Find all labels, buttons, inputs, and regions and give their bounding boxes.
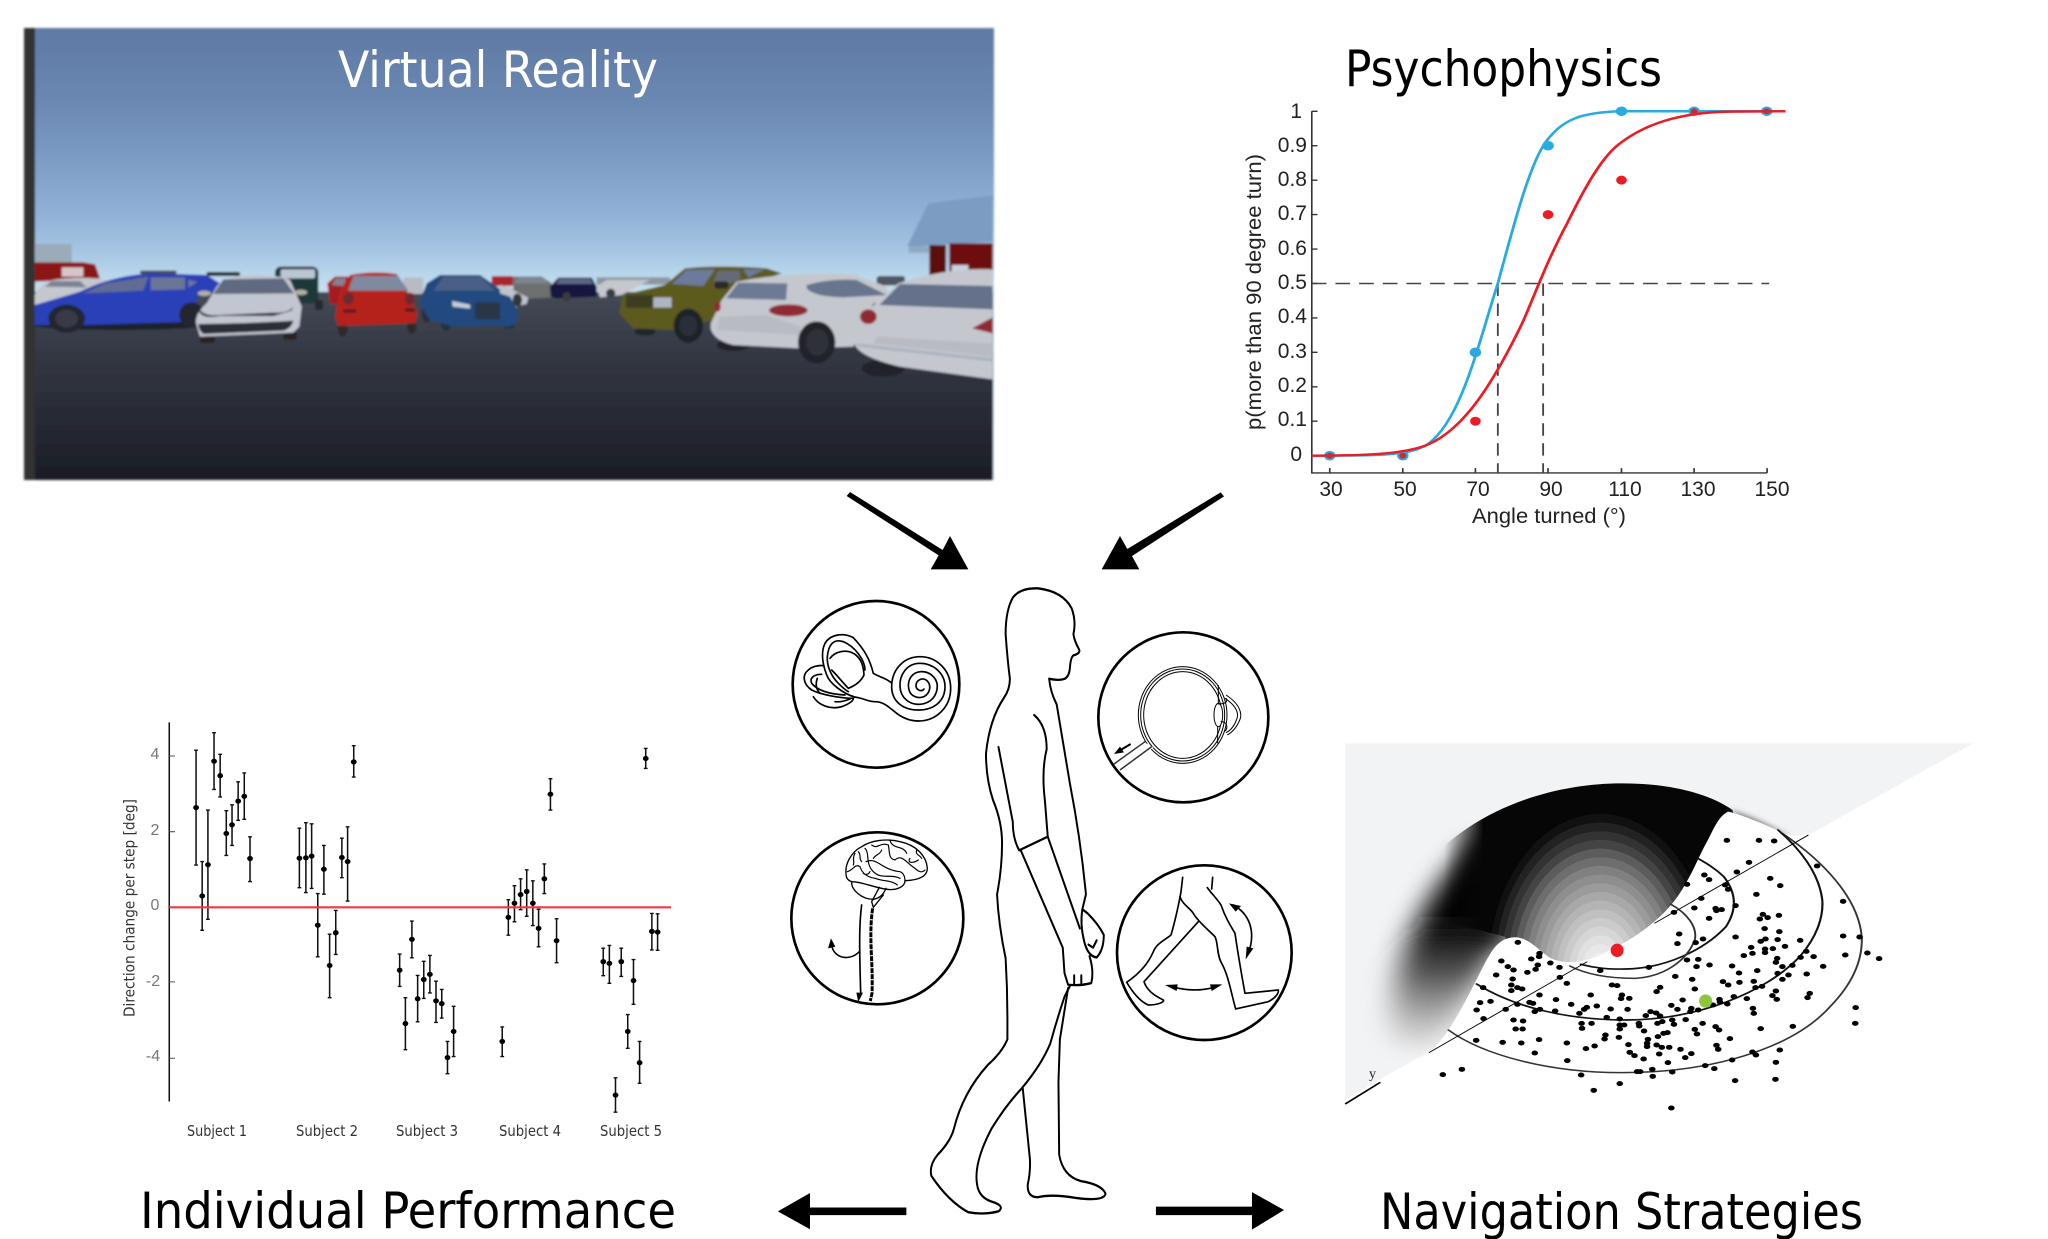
- y axis title: Direction change per step [deg]: [120, 799, 138, 1017]
- subject labels: Subject 4: [499, 1122, 561, 1140]
- floor cut-out: [1340, 743, 2020, 1239]
- arrow: to individual performance: [778, 1193, 906, 1229]
- chart: psychometric curves: [1243, 100, 1790, 528]
- y axis tick labels: 0.5: [1278, 271, 1307, 294]
- green point: [1699, 994, 1712, 1008]
- bowl of surface: [1446, 783, 1734, 962]
- x axis title: Angle turned (°): [1472, 505, 1626, 528]
- zero line: [169, 904, 671, 910]
- subject 1: [194, 733, 252, 930]
- x axis tick labels: 50: [1393, 478, 1417, 501]
- chart: direction change per step by subject: [120, 722, 671, 1140]
- icon: walking legs: [1117, 865, 1292, 1040]
- mean markers: [196, 758, 658, 1095]
- y axis tick labels: -4: [146, 1048, 160, 1065]
- y axis stub: [1345, 1082, 1380, 1104]
- icon: inner ear: [793, 601, 959, 768]
- pale surface plane: [1345, 743, 1973, 1100]
- x axis tick labels: 90: [1539, 478, 1563, 501]
- figure outline: [931, 588, 1106, 1213]
- subject labels: [187, 1122, 662, 1140]
- x axis tick labels: 70: [1466, 478, 1490, 501]
- subject 2: [297, 746, 356, 998]
- x axis tick labels: 30: [1319, 478, 1343, 501]
- axis letter y: y: [1369, 1067, 1376, 1082]
- y axis tick labels: 0.1: [1278, 408, 1307, 431]
- fold shading: [1728, 810, 1789, 837]
- y axis tick labels: 1: [1290, 100, 1302, 123]
- y axis tick labels: 0.7: [1278, 202, 1307, 225]
- y axis tick labels: 4: [151, 746, 160, 763]
- y axis tick labels: [1278, 100, 1307, 466]
- subject 4: [500, 779, 558, 1057]
- y axis tick labels: -2: [146, 973, 160, 990]
- left lobe of surface: [1393, 830, 1511, 1055]
- scatter points: [1443, 840, 1879, 1108]
- subject labels: Subject 2: [296, 1122, 358, 1140]
- scene image: car park: [24, 28, 994, 480]
- subject 3: [398, 921, 456, 1074]
- heading: Psychophysics: Psychophysics: [1345, 40, 1662, 98]
- y axis tick labels: 0: [1290, 443, 1302, 466]
- panel: virtual reality scene: [24, 28, 994, 480]
- x axis tick labels: 130: [1680, 478, 1716, 501]
- arrow: from psychophysics: [1102, 492, 1224, 569]
- subject 5: [601, 748, 660, 1112]
- title: Virtual Reality: Virtual Reality: [338, 41, 658, 99]
- y axis tick labels: 0.6: [1278, 237, 1307, 260]
- arrow: to navigation strategies: [1156, 1192, 1284, 1230]
- diagonal axis: [1429, 835, 1808, 1053]
- y axis tick labels: 0.8: [1278, 168, 1307, 191]
- subject labels: Subject 5: [600, 1122, 662, 1140]
- x axis tick labels: [1319, 478, 1790, 501]
- heading: Individual Performance: Individual Performance: [140, 1182, 676, 1239]
- contour rings: [1448, 830, 1862, 1073]
- chart: navigation surface and scatter: [1344, 744, 1972, 1110]
- y axis tick labels: 0.3: [1278, 340, 1307, 363]
- x axis tick labels: 110: [1608, 478, 1642, 501]
- arrows: inputs to walker: [847, 492, 1224, 569]
- y axis tick labels: [146, 746, 160, 1065]
- illustration: walking figure: [778, 588, 1284, 1230]
- icon: eye: [1098, 632, 1268, 802]
- icon: brain and spinal cord: [791, 832, 963, 1004]
- y axis title: p(more than 90 degree turn): [1243, 154, 1266, 430]
- y axis tick labels: 0.2: [1278, 374, 1307, 397]
- plot lines and points: [1312, 111, 1785, 473]
- red point: [1611, 944, 1624, 957]
- y axis tick labels: 0: [151, 897, 160, 914]
- y axis tick labels: 2: [151, 822, 160, 839]
- subject labels: Subject 3: [396, 1122, 458, 1140]
- arrow: from virtual reality: [847, 492, 968, 569]
- y axis tick labels: 0.4: [1278, 305, 1307, 328]
- x axis tick labels: 150: [1754, 478, 1790, 501]
- y axis tick labels: 0.9: [1278, 134, 1307, 157]
- subject labels: Subject 1: [187, 1122, 247, 1140]
- error bars and axis: [169, 722, 671, 1112]
